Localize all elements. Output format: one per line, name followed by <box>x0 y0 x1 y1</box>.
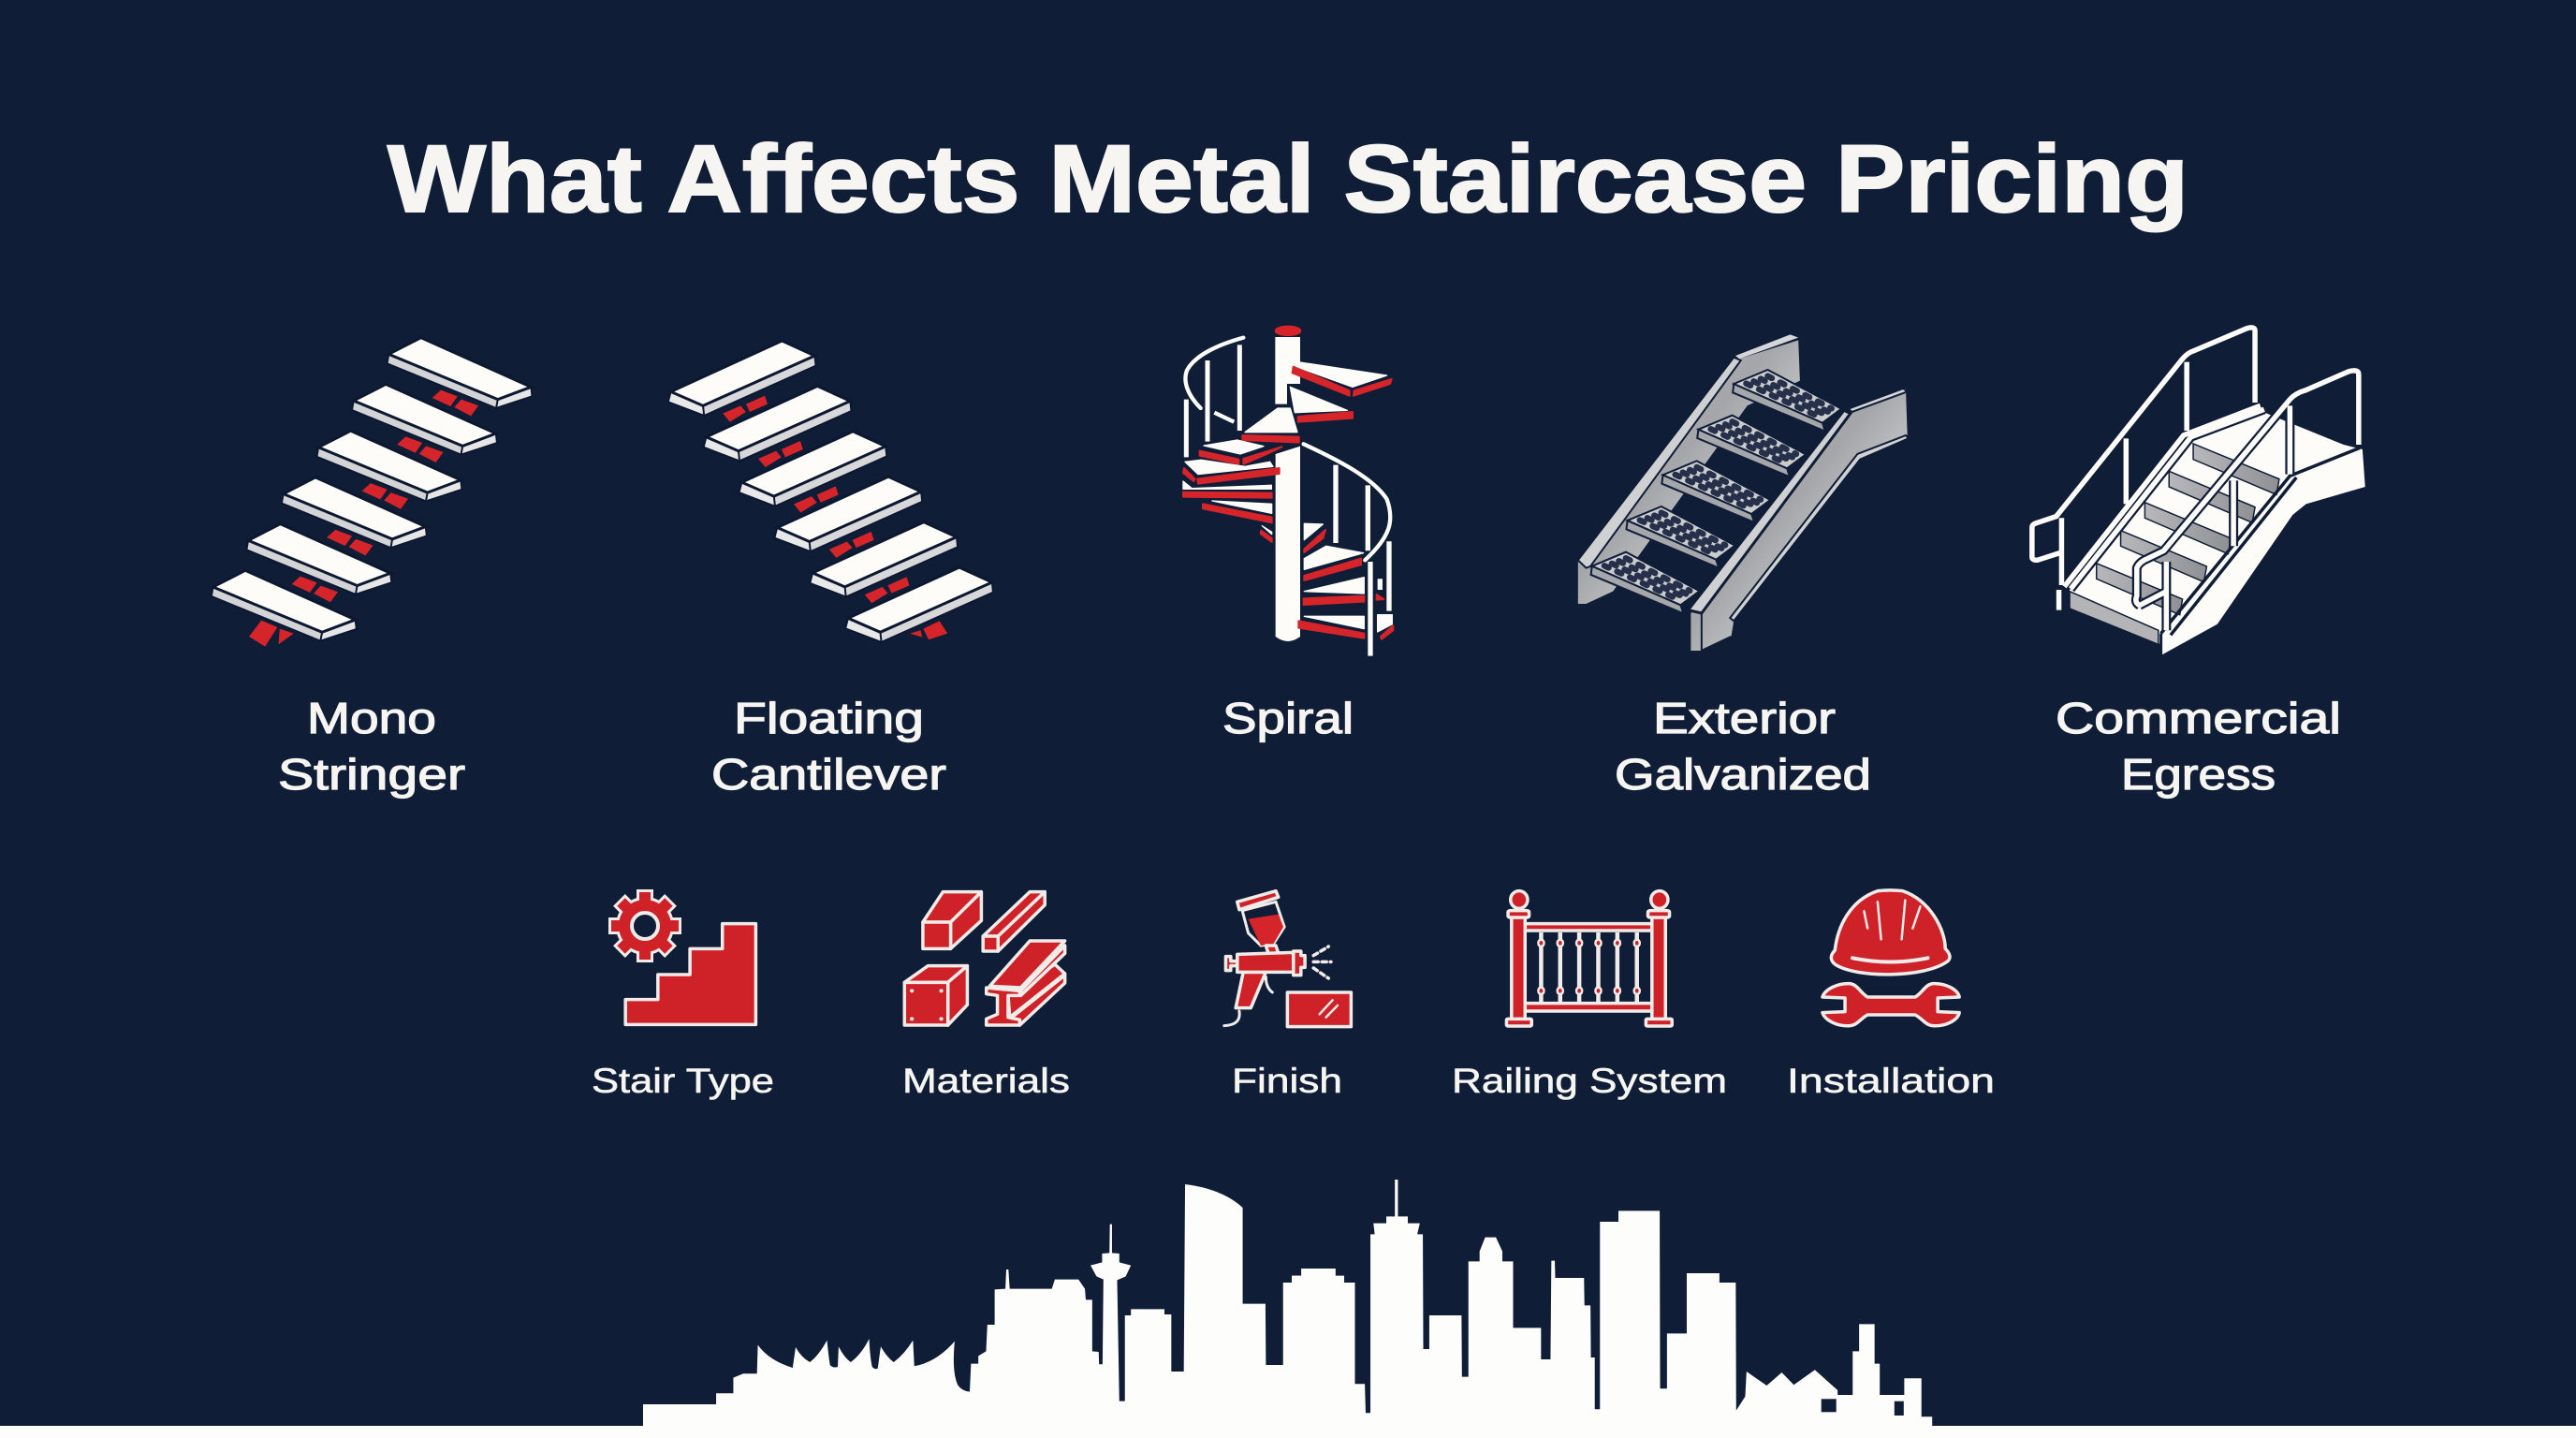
factor: installation <box>1787 890 1995 1100</box>
icon: mono stringer staircase <box>212 338 533 647</box>
factor: railing system <box>1452 891 1727 1100</box>
factor: materials <box>902 892 1070 1100</box>
stair type: floating cantilever <box>668 341 993 799</box>
label: installation: Installation <box>1787 1062 1995 1100</box>
stair type: mono stringer <box>212 338 533 799</box>
stair type: spiral <box>1183 327 1393 742</box>
icon: stairs and gear <box>611 892 755 1024</box>
label: exterior galvanized: Galvanized <box>1615 750 1871 799</box>
label: commercial egress: Egress <box>2121 750 2276 799</box>
icon: exterior galvanized staircase <box>1578 334 1909 651</box>
factor: stair type <box>592 892 774 1100</box>
label: finish: Finish <box>1232 1062 1342 1100</box>
city skyline silhouette <box>627 1180 1932 1438</box>
label: exterior galvanized: Exterior <box>1653 694 1836 742</box>
factor: finish <box>1224 891 1351 1100</box>
title: What Affects Metal Staircase Pricing <box>388 125 2188 232</box>
icon: railing with balusters <box>1506 891 1672 1026</box>
icon: commercial egress staircase <box>2032 328 2365 655</box>
bottom white strip <box>0 1426 2576 1438</box>
label: floating cantilever: Cantilever <box>711 750 946 799</box>
icon: floating cantilever staircase <box>668 341 993 642</box>
label: mono stringer: Stringer <box>278 750 465 799</box>
label: materials: Materials <box>902 1062 1070 1100</box>
stair type: commercial egress <box>2032 328 2365 799</box>
icon: hard hat and wrench <box>1822 890 1959 1026</box>
label: spiral: Spiral <box>1222 694 1354 742</box>
label: mono stringer: Mono <box>307 694 436 742</box>
label: railing system: Railing System <box>1452 1062 1727 1100</box>
icon: spray gun and panel <box>1224 891 1351 1027</box>
icon: spiral staircase <box>1183 327 1393 656</box>
label: floating cantilever: Floating <box>734 694 924 742</box>
label: stair type: Stair Type <box>592 1062 774 1100</box>
stair type: exterior galvanized <box>1578 334 1909 799</box>
icon: steel stock shapes <box>904 892 1065 1025</box>
label: commercial egress: Commercial <box>2056 694 2341 742</box>
